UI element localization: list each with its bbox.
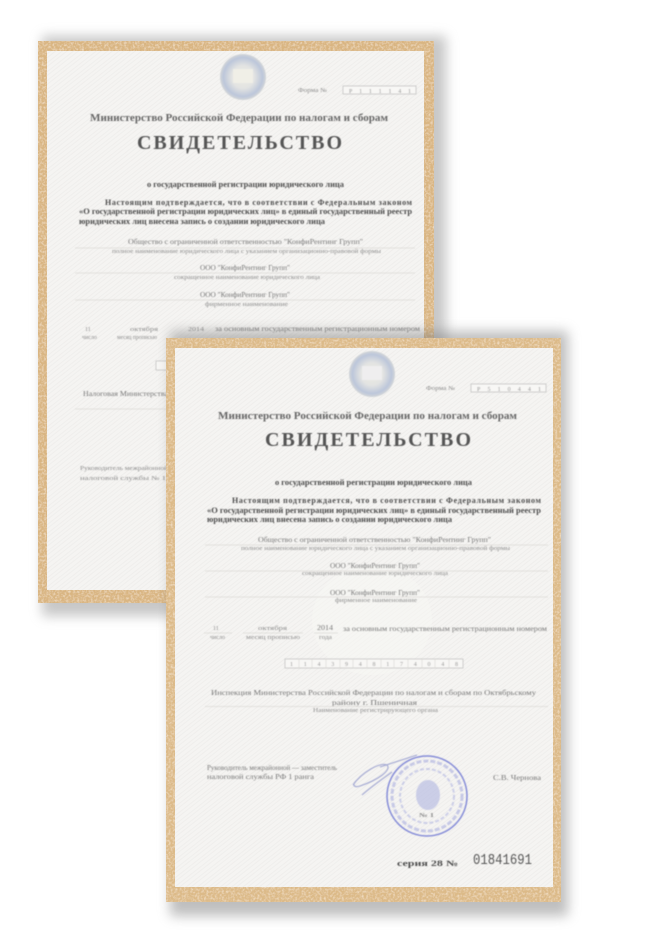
back certificate subtitle: о государственной регистрации юридического лица	[147, 180, 344, 189]
certificate: back	[38, 41, 434, 603]
front certificate date row: месяц прописью	[246, 635, 301, 641]
back certificate issuer text: налоговой службы № 1	[80, 475, 166, 482]
front certificate stamp number: № 1	[419, 813, 434, 819]
back certificate company fields: фирменное наименование	[205, 301, 288, 308]
back certificate paper	[47, 51, 424, 590]
front certificate signature	[353, 755, 417, 795]
front certificate signatory position: Руководитель межрайонной — заместитель	[207, 764, 337, 772]
front certificate paragraph: Настоящим подтверждается, что в соответствии с Федеральным законом	[232, 496, 542, 505]
back certificate company fields: сокращенное наименование юридического лица	[174, 275, 320, 281]
back certificate date row: за основным государственным регистрационным номером	[215, 325, 421, 333]
front certificate frame	[166, 338, 561, 902]
back certificate form number	[298, 86, 416, 95]
front certificate registration number boxes	[285, 659, 463, 668]
front certificate issuer text	[205, 689, 548, 714]
front certificate form number: Форма №	[426, 386, 455, 392]
front certificate seal	[349, 351, 395, 397]
front certificate date row	[204, 624, 548, 641]
back certificate company fields	[75, 238, 415, 308]
front certificate issuer text: Инспекция Министерства Российской Федерации по налогам и сборам по Октябрьскому	[211, 689, 537, 697]
front certificate round stamp	[387, 756, 467, 836]
back certificate date row: 11	[85, 327, 91, 333]
back certificate issuer text: Руководитель межрайонной	[80, 465, 169, 472]
front certificate date row: 2014	[317, 624, 334, 632]
front certificate date row: октября	[258, 625, 287, 632]
shadow: back certificate	[42, 36, 446, 616]
front certificate watermark	[312, 565, 432, 675]
shadow: front certificate	[170, 331, 568, 916]
front certificate date row: число	[210, 635, 225, 641]
back certificate issuer text: Налоговая Министерства	[83, 390, 169, 398]
front certificate subtitle: о государственной регистрации юридического лица	[275, 478, 472, 487]
front certificate issuer text: району г. Пшеничная	[332, 699, 418, 707]
front certificate company fields: ООО "КонфиРентинг Групп"	[330, 562, 420, 570]
front certificate issuer text: Наименование регистрирующего органа	[313, 708, 438, 714]
back certificate issuer text	[75, 361, 170, 482]
front certificate paper	[175, 348, 553, 887]
back certificate date row: число	[82, 335, 97, 341]
front certificate paragraph: юридических лиц внесена запись о создании юридического лица	[207, 515, 452, 524]
back certificate company fields: Общество с ограниченной ответственностью "КонфиРентинг Групп"	[128, 238, 363, 246]
back certificate paragraph: юридических лиц внесена запись о создании юридического лица	[79, 217, 325, 226]
back certificate date row: октября	[130, 326, 158, 333]
back certificate date row	[82, 325, 421, 341]
front certificate date row: за основным государственным регистрационным номером	[343, 625, 548, 633]
front certificate registration number boxes: 1 1 4 3 9 4 8 1 7 4 0 4 8	[290, 662, 458, 668]
front certificate paragraph: «О государственной регистрации юридических лиц» в единый государственный реестр	[207, 506, 542, 515]
front certificate company fields: фирменное наименование	[335, 597, 417, 604]
back certificate company fields: полное наименование юридического лица с указанием организационно-правовой формы	[112, 248, 381, 255]
front certificate form number: Р 5 1 0 4 4 1	[477, 387, 541, 393]
back certificate form number: Форма №	[298, 88, 327, 94]
back certificate company fields: ООО "КонфиРентинг Групп"	[200, 264, 290, 272]
back certificate company fields: ООО "КонфиРентинг Групп"	[200, 291, 290, 299]
front certificate date row: года	[319, 635, 332, 641]
front certificate title: СВИДЕТЕЛЬСТВО	[265, 429, 471, 451]
back certificate form number: Р 1 1 1 1 4 1	[349, 89, 411, 95]
front certificate company fields: ООО "КонфиРентинг Групп"	[330, 589, 420, 597]
front certificate form number	[426, 384, 546, 393]
back certificate date row: месяц прописью	[117, 335, 157, 341]
front certificate series: серия 28 №	[397, 859, 458, 868]
back certificate date row: 2014	[188, 327, 204, 333]
front certificate company fields	[205, 536, 548, 604]
front certificate serial number: 01841691	[473, 852, 532, 869]
front certificate company fields: сокращенное наименование юридического лица	[302, 571, 448, 577]
front certificate signatory position: налоговой службы РФ 1 ранга	[207, 773, 315, 781]
front certificate company fields: полное наименование юридического лица с указанием организационно-правовой формы	[241, 545, 510, 552]
back certificate paragraph: Настоящим подтверждается, что в соответствии с Федеральным законом	[105, 198, 413, 207]
back certificate frame	[38, 41, 434, 603]
back certificate paragraph	[79, 198, 413, 226]
front certificate signatory position	[207, 764, 337, 781]
back certificate ministry line: Министерство Российской Федерации по налогам и сборам	[90, 113, 388, 124]
back certificate seal	[220, 54, 266, 100]
front certificate date row: 11	[213, 626, 219, 632]
back certificate paragraph: «О государственной регистрации юридических лиц» в единый государственный реестр	[79, 207, 413, 216]
front certificate signatory name: С.В. Чернова	[493, 774, 542, 782]
front certificate ministry line: Министерство Российской Федерации по налогам и сборам	[218, 411, 517, 422]
front certificate company fields: Общество с ограниченной ответственностью "КонфиРентинг Групп"	[258, 536, 491, 544]
front certificate paragraph	[207, 496, 542, 524]
certificate: front	[166, 338, 561, 902]
back certificate title: СВИДЕТЕЛЬСТВО	[137, 132, 342, 154]
